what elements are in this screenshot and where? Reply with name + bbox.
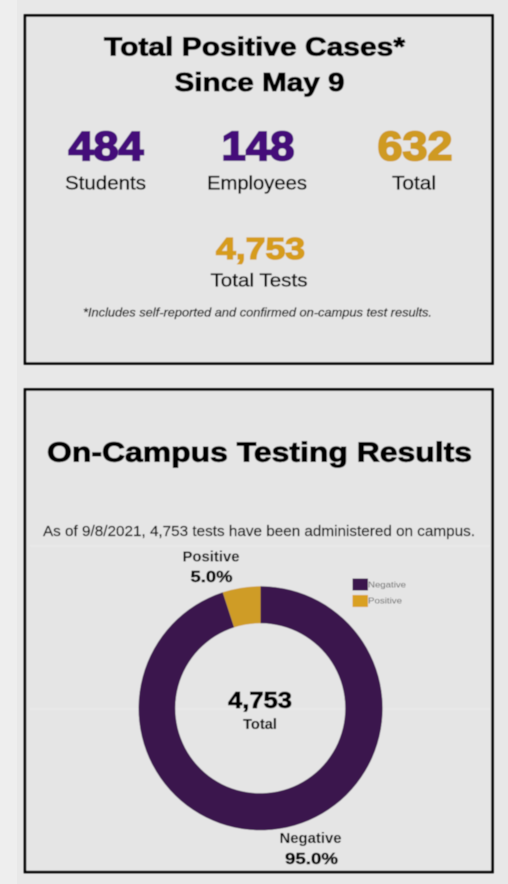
heading: total positive cases xyxy=(104,32,406,97)
donut center total: 4,753 xyxy=(228,687,292,713)
label: positive xyxy=(182,548,240,586)
legend: Positive xyxy=(368,596,403,606)
panel frame xyxy=(25,16,492,364)
stat: total tests: Total Tests xyxy=(210,270,308,290)
label: positive: 5.0% xyxy=(190,569,232,586)
legend xyxy=(352,578,407,607)
stat: employees xyxy=(207,123,307,194)
panel frame xyxy=(25,390,492,872)
stat: students: Students xyxy=(65,174,146,194)
label: positive: Positive xyxy=(182,548,240,566)
stat: total xyxy=(378,123,452,194)
stat: total tests xyxy=(210,232,308,290)
stat: employees: Employees xyxy=(207,174,307,194)
donut segment: positive 5% xyxy=(223,586,260,627)
heading: total positive cases: Since May 9 xyxy=(174,67,344,97)
footnote: *Includes self-reported and confirmed on-campus test results. xyxy=(83,308,432,320)
heading: total positive cases: Total Positive Cases* xyxy=(104,32,406,62)
subtitle: As of 9/8/2021, 4,753 tests have been administered on campus. xyxy=(43,524,475,540)
heading: on-campus testing results: On-Campus Testing Results xyxy=(47,436,472,468)
donut center total xyxy=(228,687,292,733)
stat: total: 632 xyxy=(378,123,452,169)
stat: employees: 148 xyxy=(222,123,294,169)
stat: students xyxy=(65,123,146,194)
panel: total positive cases xyxy=(25,16,492,364)
label: negative xyxy=(280,830,342,868)
donut center total: Total xyxy=(243,716,277,733)
label: negative: 95.0% xyxy=(285,851,338,868)
donut segment: negative 95% xyxy=(139,586,383,830)
panel: on-campus testing results xyxy=(25,390,492,872)
stat: students: 484 xyxy=(68,123,144,169)
stat: total tests: 4,753 xyxy=(216,232,305,266)
donut chart xyxy=(139,586,383,830)
label: negative: Negative xyxy=(280,830,342,847)
stat: total: Total xyxy=(392,174,436,194)
legend: Negative xyxy=(368,580,407,590)
